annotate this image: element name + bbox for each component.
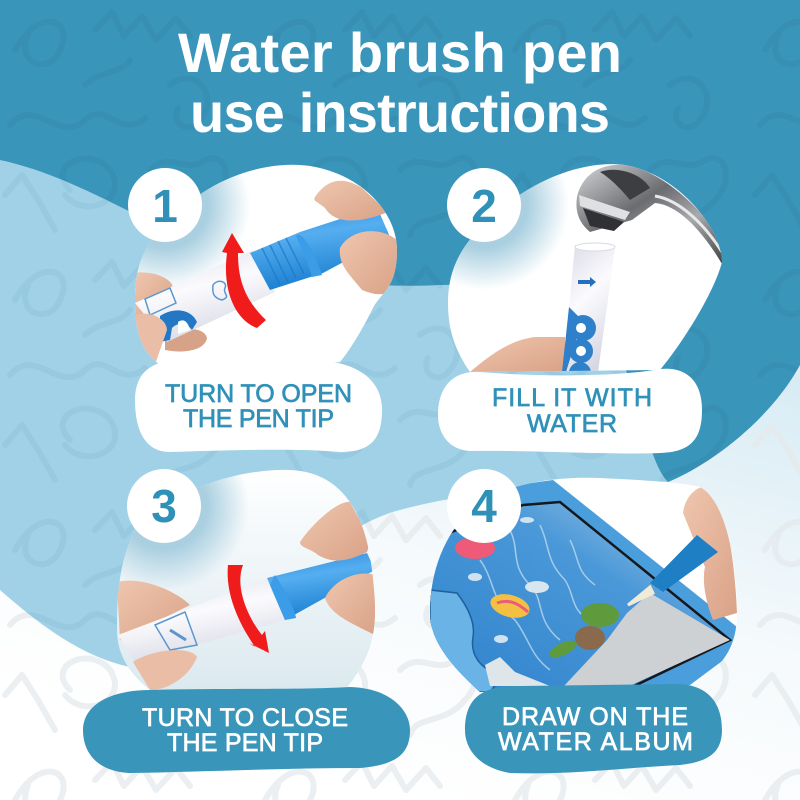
background: light blue wave bbox=[0, 160, 668, 800]
label: step 4: WATER ALBUM bbox=[498, 728, 693, 756]
arrow: red counter-clockwise bbox=[222, 233, 266, 328]
number badge 2 bbox=[447, 168, 521, 242]
number badge 1: 1 bbox=[152, 180, 178, 232]
label: step 3 bbox=[83, 687, 410, 773]
background: white wave bbox=[0, 365, 800, 800]
label: step 2: FILL IT WITH bbox=[492, 384, 652, 412]
title: use instructions bbox=[190, 81, 610, 144]
label: step 2 bbox=[438, 369, 702, 453]
panel: step 2 bbox=[438, 164, 722, 454]
panel: step 4 bbox=[428, 469, 740, 773]
label: step 4 bbox=[465, 684, 722, 773]
label: step 4: DRAW ON THE bbox=[502, 703, 688, 731]
photo: turning the pen closed bbox=[117, 470, 375, 690]
photo: filling the pen under a tap bbox=[448, 164, 722, 372]
number badge 4 bbox=[447, 469, 521, 543]
label: step 1: THE PEN TIP bbox=[183, 405, 334, 433]
label: step 1: TURN TO OPEN bbox=[165, 380, 352, 408]
panel: step 1 bbox=[128, 164, 397, 452]
title bbox=[178, 21, 622, 144]
number badge 3 bbox=[127, 469, 201, 543]
number badge 4: 4 bbox=[471, 480, 497, 532]
number badge 3: 3 bbox=[151, 480, 177, 532]
label: step 3: TURN TO CLOSE bbox=[142, 704, 348, 732]
arrow: red clockwise bbox=[228, 565, 269, 653]
label: step 2: WATER bbox=[527, 410, 617, 438]
photo: turning the pen open bbox=[135, 164, 397, 364]
number badge 1 bbox=[128, 168, 202, 242]
label: step 3: THE PEN TIP bbox=[167, 729, 323, 757]
number badge 2: 2 bbox=[471, 180, 497, 232]
label: step 1 bbox=[135, 360, 382, 452]
photo: drawing on the water album bbox=[428, 475, 740, 700]
panel: step 3 bbox=[83, 469, 410, 773]
title: Water brush pen bbox=[178, 21, 622, 84]
